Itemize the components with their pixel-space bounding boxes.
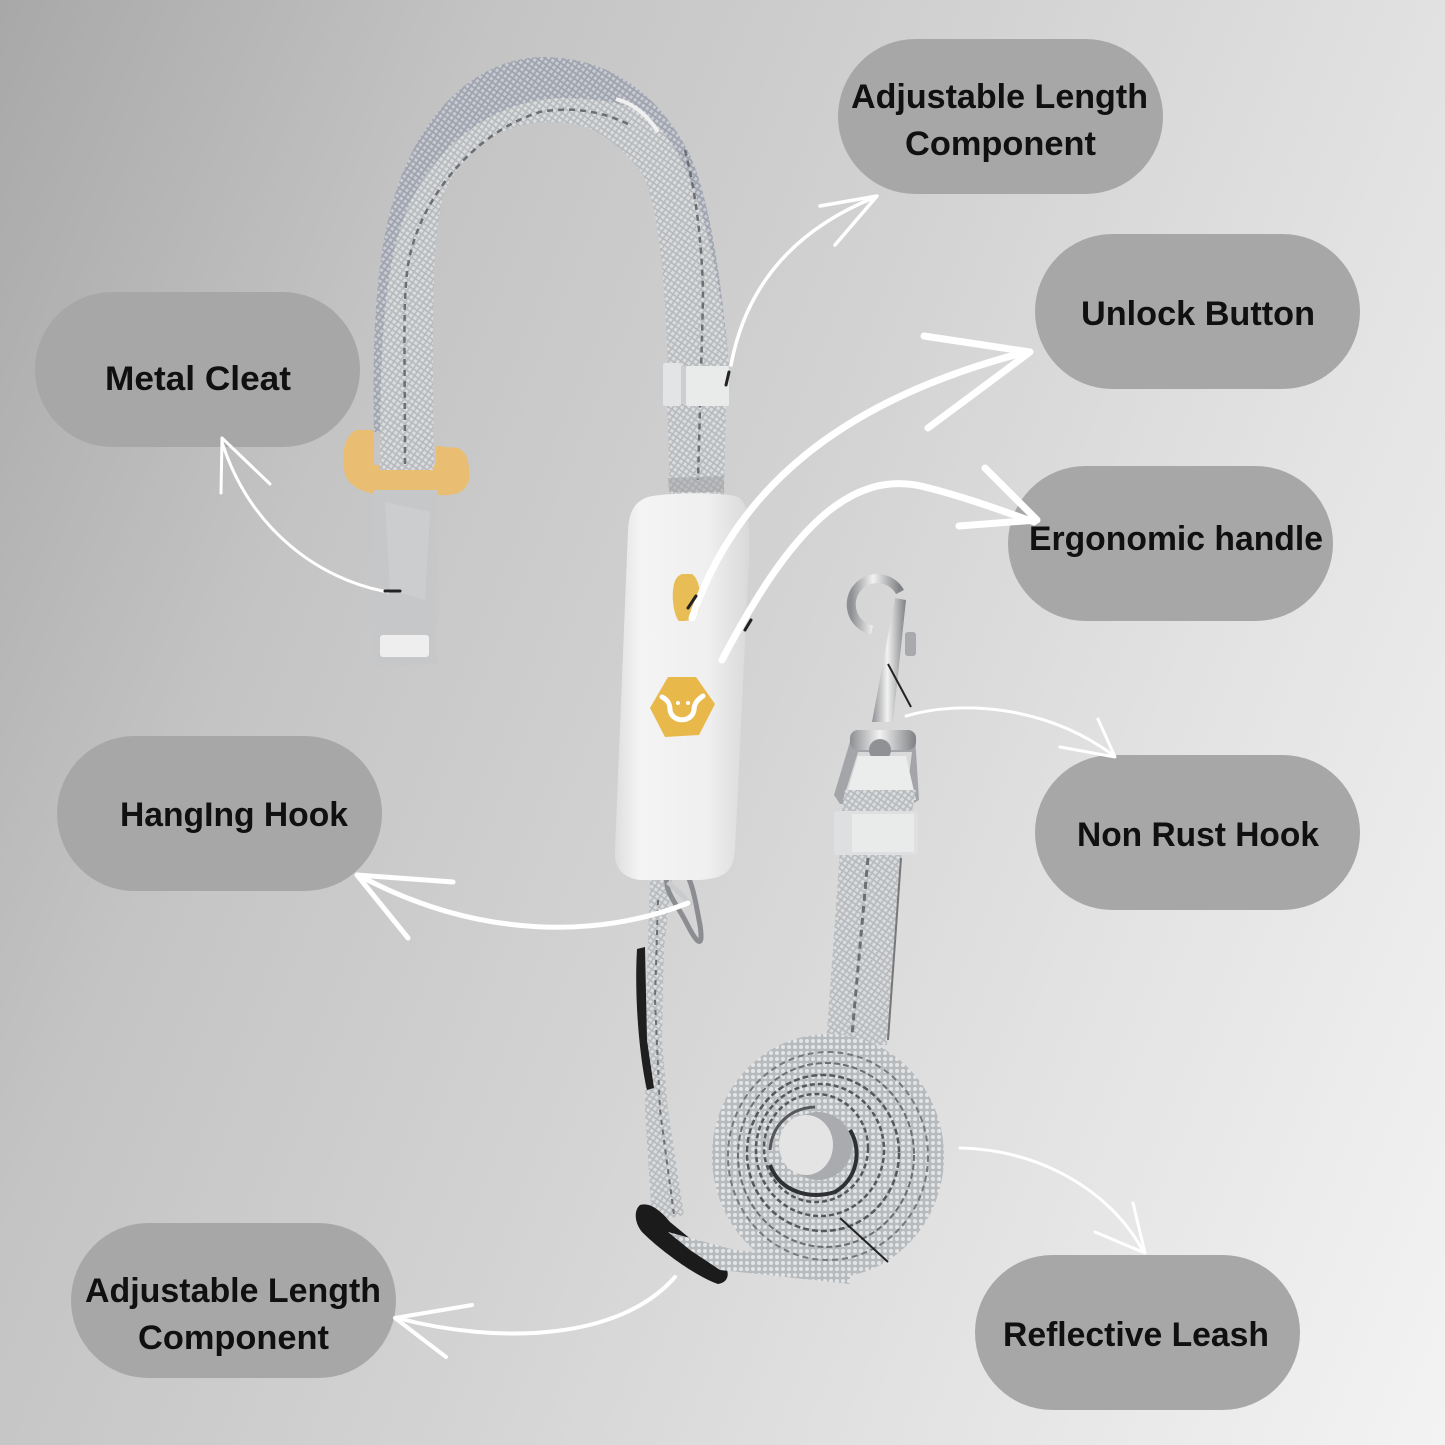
arrow: non rust hook (906, 708, 1115, 757)
arrows (221, 196, 1145, 1357)
arrow: ergonomic handle (722, 468, 1037, 660)
non rust hook (834, 579, 919, 812)
unlock button (673, 574, 700, 621)
long leash strap (826, 850, 902, 1045)
leash clip (834, 811, 918, 855)
black strap buckle (636, 1204, 728, 1284)
callout: non rust hook: Non Rust Hook (1077, 816, 1319, 854)
arrow: adjustable length bottom (395, 1277, 675, 1357)
handle body (615, 493, 749, 880)
callout: adjustable length top (838, 39, 1163, 194)
callout: metal cleat (35, 292, 360, 447)
callout: adjustable length bottom: Component (138, 1319, 329, 1357)
callout: ergonomic handle: Ergonomic handle (1029, 520, 1323, 558)
callout: adjustable length top: Component (905, 125, 1096, 163)
callout: hanging hook (57, 736, 382, 891)
callout: metal cleat: Metal Cleat (105, 360, 291, 398)
callout: adjustable length bottom (71, 1223, 396, 1378)
upper strap loop (374, 57, 729, 500)
metal cleat plate (373, 490, 438, 666)
arrow: adjustable length top (726, 196, 877, 385)
callout: adjustable length top: Adjustable Length (851, 78, 1148, 116)
callout: unlock button: Unlock Button (1081, 295, 1315, 333)
hanging hook ring (667, 872, 701, 941)
callout: hanging hook: HangIng Hook (120, 796, 348, 834)
callout: ergonomic handle (1008, 466, 1333, 621)
arrow: metal cleat (221, 438, 400, 592)
arrow: unlock button (688, 336, 1030, 618)
arrow: reflective leash (960, 1148, 1145, 1253)
callout: non rust hook (1035, 755, 1360, 910)
callout: adjustable length bottom: Adjustable Length (85, 1272, 381, 1310)
product: retractable dog leash (343, 57, 944, 1284)
brand logo badge (650, 677, 715, 737)
coiled leash (668, 1034, 944, 1284)
callout: reflective leash (975, 1255, 1300, 1410)
callout: unlock button (1035, 234, 1360, 389)
arrow: hanging hook (357, 875, 688, 938)
adjuster clip on upper strap (663, 363, 729, 406)
callout: reflective leash: Reflective Leash (1003, 1316, 1269, 1354)
lower short strap (636, 880, 684, 1222)
yellow strap slider (343, 430, 469, 495)
